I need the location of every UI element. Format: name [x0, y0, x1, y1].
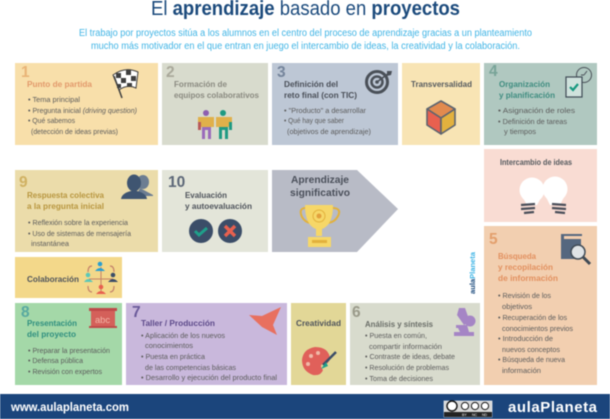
panel: 4 organización	[484, 63, 597, 145]
panel: 10 evaluación	[162, 170, 268, 252]
icon: palette and brush	[302, 347, 336, 375]
panel: 5 búsqueda: • Búsqueda de nueva	[498, 357, 565, 364]
panel: 7 taller producción: • Aplicación de los nuevos	[141, 333, 226, 340]
panel: 1 punto de partida	[15, 63, 158, 145]
panel: 6 análisis y síntesis: • Contraste de ideas, debate	[365, 354, 455, 361]
icon: microscope	[454, 308, 476, 336]
intro text: mucho más motivador en el que entran en juego el intercambio de ideas, la creatividad y la colaboración.	[91, 41, 520, 52]
panel: 5 búsqueda: objetivos	[502, 304, 533, 311]
panel: 6 análisis y síntesis: compartir información	[369, 344, 442, 351]
panel: 9 respuesta colectiva	[15, 170, 158, 252]
panel: 2 equipos colaborativos	[162, 63, 268, 145]
icon: light bulbs	[520, 176, 568, 213]
brand: vertical aulaPlaneta: aulaPlaneta	[468, 251, 477, 294]
panel: aprendizaje significativo arrow: Aprendizaje	[291, 174, 349, 186]
panel: 9 respuesta colectiva: instantánea	[31, 241, 69, 248]
intro text	[79, 28, 532, 52]
panel: 2 equipos colaborativos: equipos colaborativos	[174, 90, 259, 100]
panel: 8 presentación: • Revisión con expertos	[28, 369, 103, 376]
panel: 5 búsqueda: de información	[498, 273, 558, 283]
panel: 6 análisis y síntesis: • Resolución de problemas	[365, 365, 450, 372]
panel: 4 organización: 4	[489, 63, 498, 80]
panel: intercambio de ideas: Intercambio de ideas	[500, 157, 572, 167]
panel: 3 reto final: • Qué hay que saber	[284, 118, 345, 125]
creative commons badge: BY	[462, 413, 467, 417]
panel: 5 búsqueda: • Revisión de los	[498, 293, 552, 300]
icon: checklist and clock	[566, 68, 592, 97]
panel: aprendizaje significativo arrow: significativo	[290, 187, 350, 199]
panel: aprendizaje significativo arrow	[272, 170, 398, 252]
icon: magnifier over book	[561, 234, 590, 264]
panel: 3 reto final: 3	[277, 64, 286, 81]
panel: 5 búsqueda: información	[502, 368, 541, 375]
panel: 3 reto final: (objetivos de aprendizaje)	[287, 129, 371, 136]
panel: 5 búsqueda: y recopilación	[498, 262, 553, 272]
panel: creatividad: Creatividad	[296, 318, 341, 328]
icon: team	[198, 110, 232, 139]
panel: 6 análisis y síntesis: Análisis y síntesis	[365, 319, 433, 329]
panel: 1 punto de partida: Punto de partida	[27, 79, 92, 89]
panel: 7 taller producción	[126, 303, 287, 385]
panel: 10 evaluación: 10	[168, 174, 185, 191]
panel: 4 organización: y planificación	[499, 90, 555, 100]
creative commons badge	[444, 401, 492, 417]
panel: 9 respuesta colectiva: Respuesta colectiva	[27, 190, 104, 200]
panel: 1 punto de partida: • Tema principal	[28, 97, 80, 104]
icon: origami bird	[249, 307, 281, 335]
panel: 7 taller producción: • Desarrollo y ejecución del producto final	[141, 375, 277, 382]
footer logo: aulaPlaneta	[508, 399, 598, 416]
icon: cube	[427, 101, 455, 134]
panel: 9 respuesta colectiva: • Reflexión sobre la experiencia	[28, 220, 128, 227]
panel: 6 análisis y síntesis: • Toma de decisiones	[365, 376, 434, 383]
panel: 4 organización: Organización	[499, 79, 550, 89]
panel: 5 búsqueda: • Recuperación de los	[498, 315, 568, 322]
panel: 1 punto de partida: (detección de ideas previas)	[31, 129, 118, 136]
icon: cross	[218, 219, 242, 243]
panel: 7 taller producción: 7	[132, 304, 141, 321]
panel: 5 búsqueda: 5	[489, 231, 498, 248]
creative commons badge: ND	[482, 413, 488, 417]
icon: checkered flag	[113, 70, 138, 98]
panel: 5 búsqueda	[484, 226, 597, 385]
panel: 5 búsqueda: • Introducción de	[498, 336, 553, 343]
panel: 8 presentación: • Defensa pública	[28, 358, 83, 365]
panel: 4 organización: y tiempos	[504, 129, 537, 136]
panel: transversalidad	[402, 63, 480, 145]
icon: abc board: abc	[95, 315, 111, 325]
panel: 3 reto final: Definición del	[284, 79, 338, 89]
panel: 6 análisis y síntesis: • Puesta en común,	[365, 333, 427, 340]
panel: 1 punto de partida: 1	[21, 64, 30, 81]
panel: creatividad	[291, 303, 346, 385]
footer url: www.aulaplaneta.com	[10, 400, 129, 414]
panel: 5 búsqueda: nuevos conceptos	[502, 347, 561, 354]
intro text: El trabajo por proyectos sitúa a los alumnos en el centro del proceso de aprendizaje gracias a un planteamiento	[79, 28, 532, 39]
icon: check	[189, 219, 213, 243]
panel: 9 respuesta colectiva: 9	[19, 174, 28, 191]
panel: 8 presentación: 8	[21, 304, 30, 321]
panel: 6 análisis y síntesis	[350, 303, 480, 385]
panel: 10 evaluación: Evaluación	[185, 190, 227, 200]
panel: 5 búsqueda: conocimientos previos	[502, 326, 574, 333]
panel: 4 organización: • Asignación de roles	[498, 108, 576, 115]
panel: 6 análisis y síntesis: 6	[352, 304, 361, 321]
panel: 3 reto final: • "Producto" a desarrollar	[284, 108, 367, 115]
panel: 7 taller producción: de las competencias básicas	[145, 365, 237, 372]
panel: 9 respuesta colectiva: a la pregunta inicial	[27, 201, 104, 211]
panel: 3 reto final	[272, 63, 398, 145]
panel: transversalidad: Transversalidad	[411, 79, 472, 89]
panel: 1 punto de partida: • Pregunta inicial (driving question)	[28, 108, 137, 115]
creative commons badge: NC	[472, 413, 478, 417]
panel: 8 presentación: del proyecto	[27, 329, 76, 339]
panel: colaboración: Colaboración	[27, 274, 79, 284]
panel: 8 presentación: • Preparar la presentación	[28, 348, 110, 355]
panel: 7 taller producción: Taller / Producción	[141, 318, 215, 328]
footer bar	[0, 394, 610, 419]
icon: target	[366, 71, 392, 92]
icon: trophy	[301, 205, 339, 247]
panel: 4 organización: • Definición de tareas	[498, 119, 568, 126]
panel: 8 presentación	[15, 303, 122, 385]
panel: 7 taller producción: conocimientos	[145, 343, 194, 350]
icon: collaboration network	[84, 262, 118, 294]
panel: 10 evaluación: y autoevaluación	[185, 201, 252, 211]
panel: 8 presentación: Presentación	[27, 318, 77, 328]
icon: two people	[121, 174, 153, 199]
panel: 2 equipos colaborativos: 2	[166, 64, 175, 81]
panel: 1 punto de partida: • Qué sabemos	[28, 118, 76, 125]
panel: colaboración	[15, 257, 122, 298]
panel: 9 respuesta colectiva: • Uso de sistemas de mensajería	[28, 231, 131, 238]
panel: 5 búsqueda: Búsqueda	[498, 251, 536, 261]
panel: 7 taller producción: • Puesta en práctica	[141, 354, 205, 361]
panel: intercambio de ideas	[484, 149, 597, 222]
panel: 3 reto final: reto final (con TIC)	[284, 90, 357, 100]
panel: 2 equipos colaborativos: Formación de	[174, 79, 227, 89]
